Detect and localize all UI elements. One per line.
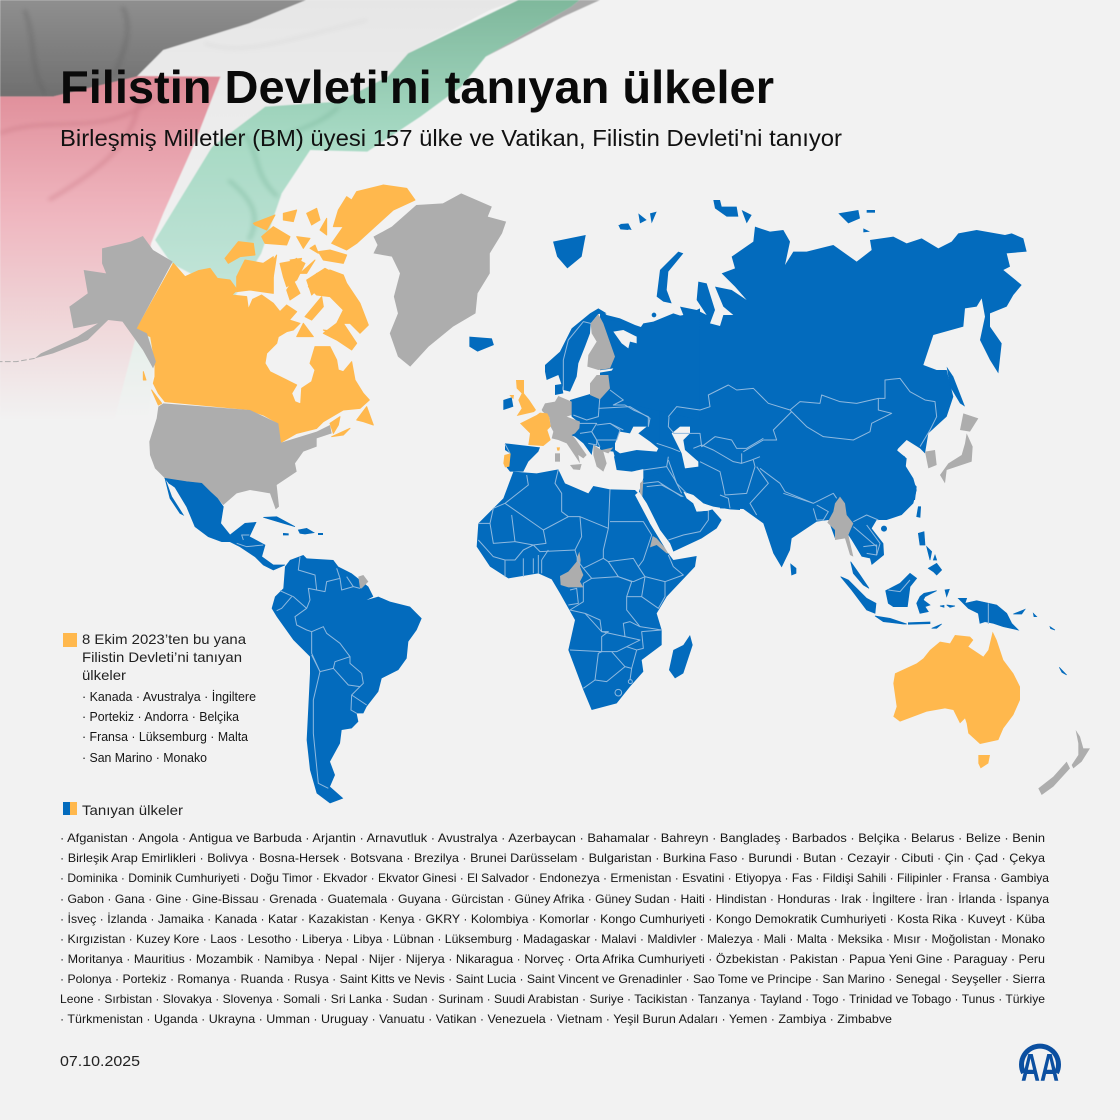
Arabian Peninsula	[639, 470, 722, 552]
Eurasia base: Russia and Central Asia	[600, 200, 1027, 500]
list of recognising countries: · Gabon · Gana · Gine · Gine-Bissau · Grenada · Guatemala · Guyana · Gürcistan · Güney Afrika · Güney Sudan · Haiti · Hindistan · Honduras · Irak · İngiltere · İran · İrlanda · İspanya	[60, 892, 1049, 906]
list of recent recognisers: · Portekiz · Andorra · Belçika	[82, 710, 239, 724]
Asian borders	[610, 378, 937, 497]
legend heading: Filistin Devleti’ni tanıyan	[82, 649, 242, 665]
Southeast Asia borders	[720, 467, 988, 624]
list of recognising countries: · Kırgızistan · Kuzey Kore · Laos · Lesotho · Liberya · Libya · Lübnan · Lüksemburg · Madagaskar · Malavi · Maldivler · Malezya · Mali · Malta · Meksika · Mısır · Moğolistan · Monako	[60, 932, 1045, 946]
Iceland and Svalbard	[469, 224, 629, 352]
Tasmania	[978, 755, 990, 768]
Portugal	[503, 453, 511, 467]
Türkiye	[614, 448, 673, 473]
European borders	[505, 395, 650, 453]
Sicily and Sardinia	[555, 453, 582, 470]
Northern Ireland	[509, 395, 514, 399]
Iran and Pakistan coast	[660, 460, 740, 510]
world map	[0, 185, 1090, 803]
list of recognising countries: · Moritanya · Mauritius · Mozambik · Namibya · Nepal · Nijer · Nijerya · Nikaragua · Norveç · Orta Afrika Cumhuriyeti · Özbekistan · Pakistan · Papua Yeni Gine · Paraguay · Peru	[60, 952, 1045, 966]
Greenland and Alaska	[0, 193, 506, 368]
flag backdrop	[0, 0, 600, 420]
French Guiana	[358, 575, 368, 588]
Spain	[505, 443, 540, 472]
Arctic islands	[620, 200, 875, 317]
Africa continent	[477, 469, 697, 710]
Israel	[640, 480, 643, 497]
legend heading: ülkeler	[82, 667, 126, 683]
African borders	[478, 469, 708, 696]
legend swatch: orange	[63, 633, 77, 647]
France and Belgium	[520, 413, 551, 446]
legend swatch: blue and orange	[63, 802, 77, 815]
Honshu	[940, 433, 973, 483]
Eritrea	[650, 536, 670, 553]
maritime Southeast Asia	[791, 507, 1067, 675]
United States	[149, 403, 332, 509]
list of recent recognisers: · San Marino · Monako	[82, 751, 207, 765]
continent	[272, 555, 422, 803]
Norway and Sweden	[545, 308, 607, 392]
list of recognising countries: · İsveç · İzlanda · Jamaika · Kanada · Katar · Kazakistan · Kenya · GKRY · Kolombiya · Komorlar · Kongo Cumhuriyeti · Kongo Demokratik Cumhuriyeti · Kosta Rika · Kuveyt · Küba	[60, 912, 1045, 926]
Kola and NW Russia	[603, 308, 700, 420]
Germany, Benelux, Alps and Italy	[542, 396, 587, 463]
New Zealand	[1038, 730, 1090, 795]
Canada and Arctic islands	[137, 185, 415, 442]
borders	[277, 557, 367, 788]
legend heading	[82, 631, 246, 683]
title: Filistin Devleti'ni tanıyan ülkeler	[60, 61, 774, 113]
seas: Black Sea, Caspian, White Sea, Gulfs	[590, 330, 713, 553]
western Europe countries	[503, 380, 650, 472]
Corsica	[557, 447, 560, 451]
Baltic states	[590, 375, 610, 399]
Denmark	[555, 384, 563, 395]
Hokkaido	[960, 413, 978, 432]
legend heading: 8 Ekim 2023’ten bu yana	[82, 631, 246, 647]
South Korea	[925, 450, 937, 468]
list of recognising countries	[60, 831, 1049, 1026]
Cameroon	[560, 552, 583, 587]
legend: recognised since 8 October 2023	[63, 631, 256, 765]
Scandinavian border	[563, 322, 591, 390]
list of recent recognisers: · Fransa · Lüksemburg · Malta	[82, 730, 248, 744]
list of recognising countries: · Türkmenistan · Uganda · Ukrayna · Umman · Uruguay · Vanuatu · Vatikan · Venezuela · Vietnam · Yeşil Burun Adaları · Yemen · Zambiya · Zimbabve	[60, 1012, 892, 1026]
Africa and Arabia	[477, 460, 740, 710]
legend label: Tanıyan ülkeler	[82, 802, 183, 818]
Ireland	[503, 397, 513, 410]
Finland	[587, 314, 615, 370]
Sakhalin	[947, 367, 965, 407]
Scandinavia and Iceland	[469, 224, 700, 420]
Greece	[593, 445, 613, 472]
legend: recognising countries	[63, 802, 183, 818]
North America	[0, 185, 506, 570]
United Kingdom	[516, 380, 536, 416]
list of recognising countries: · Birleşik Arap Emirlikleri · Bolivya · Bosna-Hersek · Botsvana · Brezilya · Brunei Darüsselam · Bulgaristan · Burkina Faso · Burundi · Butan · Cezayir · Cibuti · Çin · Çad · Çekya	[60, 851, 1045, 865]
list of recognising countries: · Polonya · Portekiz · Romanya · Ruanda · Rusya · Saint Kitts ve Nevis · Saint Lucia · Saint Vincent ve Grenadinler · Sao Tome ve Principe · San Marino · Senegal · Seyşeller · Sierra	[60, 972, 1045, 986]
South and Southeast Asia	[720, 440, 1090, 795]
Madagascar	[669, 635, 693, 678]
India, China south and Indochina	[720, 440, 917, 567]
icon: AA logo	[1021, 1046, 1059, 1090]
Novaya Zemlya	[657, 252, 683, 303]
Finland, Baltics, Japan and Koreas	[587, 314, 978, 483]
list of recognising countries: · Afganistan · Angola · Antigua ve Barbuda · Arjantin · Arnavutluk · Avustralya · Azerbaycan · Bahamalar · Bahreyn · Bangladeş · Barbados · Belçika · Belarus · Belize · Benin	[60, 831, 1045, 845]
list of recent recognisers	[82, 690, 256, 765]
list of recent recognisers: · Kanada · Avustralya · İngiltere	[82, 690, 256, 704]
Europe	[503, 380, 673, 473]
subtitle: Birleşmiş Milletler (BM) üyesi 157 ülke ve Vatikan, Filistin Devleti'ni tanıyor	[60, 125, 842, 151]
South America	[272, 555, 422, 803]
list of recognising countries: · Dominika · Dominik Cumhuriyeti · Doğu Timor · Ekvador · Ekvator Ginesi · El Salvador · Endonezya · Ermenistan · Esvatini · Etiyopya · Fas · Fildişi Sahili · Filipinler · Fransa · Gambiya	[60, 871, 1049, 885]
date: 07.10.2025	[60, 1053, 140, 1070]
icon: AA logo: AA	[1021, 1047, 1059, 1090]
list of recognising countries: Leone · Sırbistan · Slovakya · Slovenya · Somali · Sri Lanka · Sudan · Surinam · Suudi Arabistan · Suriye · Tacikistan · Tanzanya · Tayland · Togo · Trinidad ve Tobago · Tunus · Türkiye	[60, 992, 1045, 1006]
Australia	[893, 632, 1020, 744]
Myanmar	[827, 497, 853, 557]
Mexico, Central America and Caribbean	[165, 478, 323, 570]
eastern Europe and Balkans	[570, 380, 660, 455]
